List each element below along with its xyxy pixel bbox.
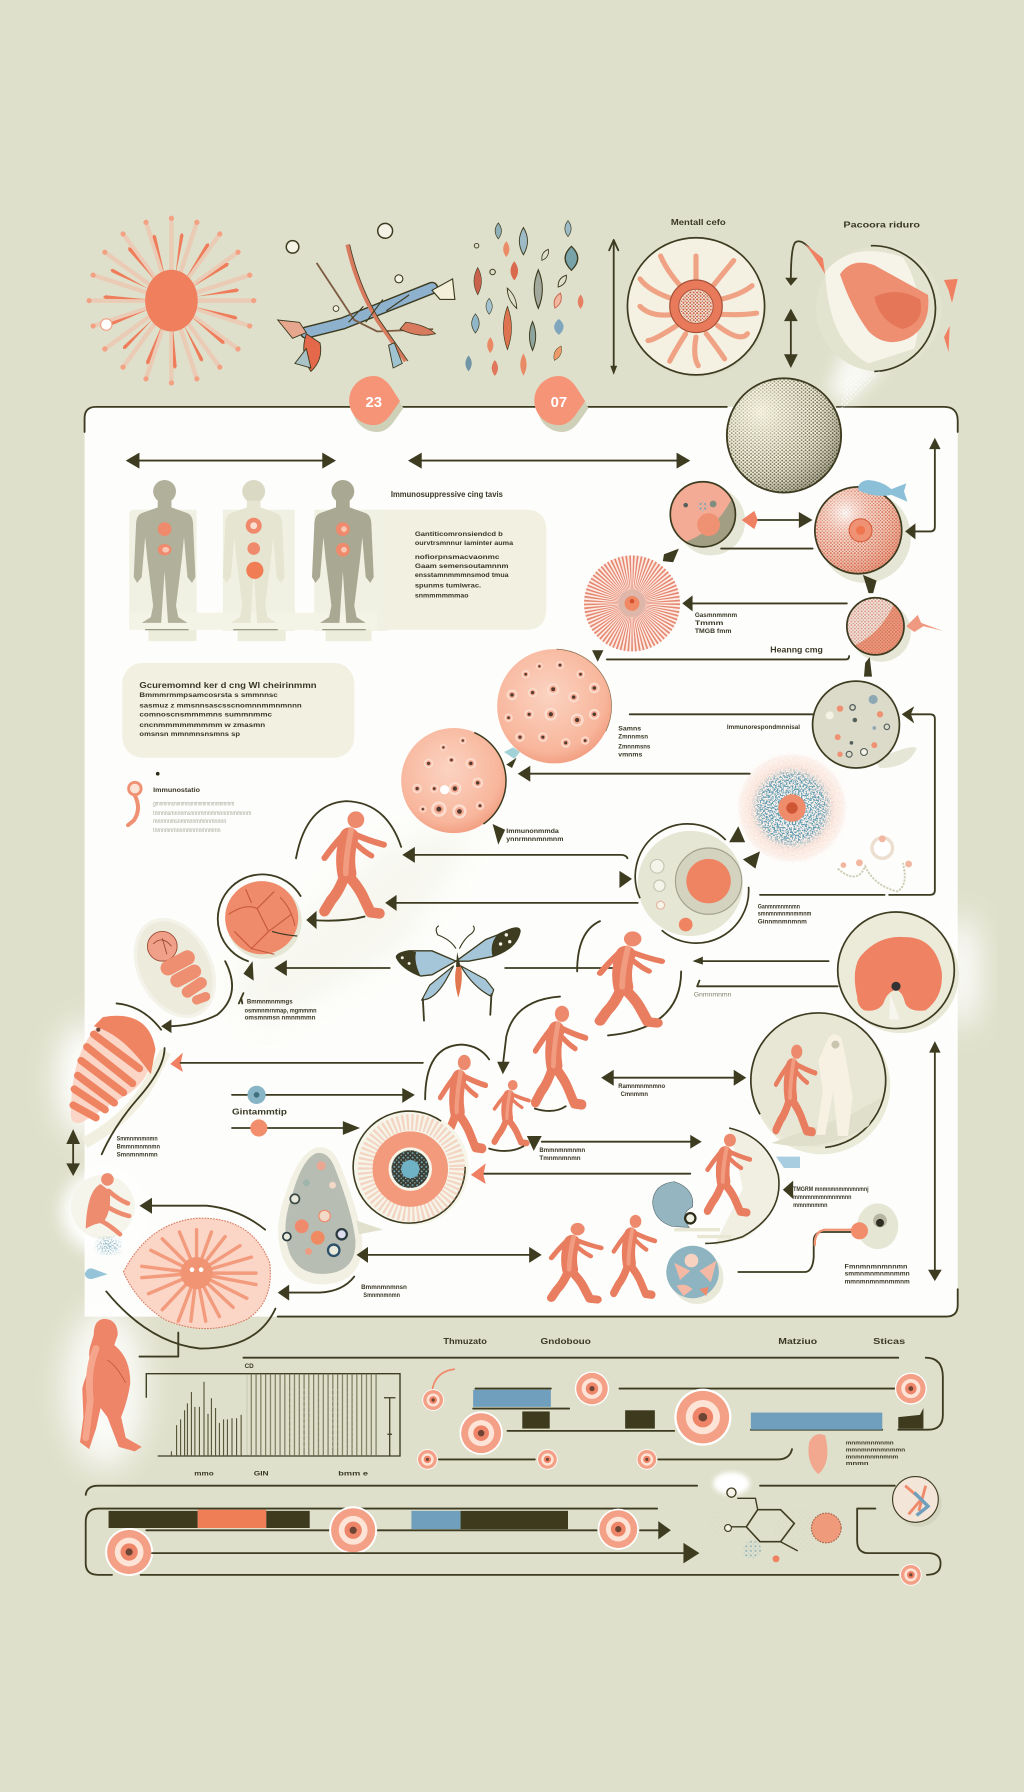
- figure: walker upper right: [577, 921, 681, 1035]
- text: walker circle note: TMGRM mnmnmnmmnmnmnj: [793, 1186, 869, 1193]
- arrows: around walker circle: Bmmnmnmnmn: [539, 1147, 585, 1154]
- text: embryo note: osmmnmrnmap, mgmmmn: [245, 1008, 317, 1015]
- text: radial cell note: Tmmm: [695, 620, 723, 627]
- icon: half orange cell: [847, 598, 943, 662]
- icon: molecule: [709, 1472, 841, 1562]
- text: arrow notes: Immunonmmda: [506, 828, 559, 835]
- text block: callout: comnoscnsmmmmns summnmmc: [139, 712, 272, 719]
- icon: pocked cell small: [401, 728, 506, 833]
- figure: crouched person: [66, 1129, 265, 1254]
- icon: crossed tools: [278, 223, 455, 371]
- soft halos: [57, 343, 978, 1469]
- arrow: between green and orange cell: [663, 511, 813, 562]
- text: pathway note: mnmn: [846, 1461, 869, 1467]
- figure: standing person: [80, 1319, 142, 1451]
- arrow: to beige cell: [630, 706, 935, 895]
- chart: spike chart: bmm e: [338, 1470, 368, 1477]
- bars: upper pathway: [473, 1390, 923, 1430]
- panel: human body figures: [129, 480, 389, 641]
- text: walker circle note: mmnmnmmn: [793, 1202, 827, 1209]
- arrow: bend into top right cell: [784, 241, 825, 368]
- label: chart headers: [245, 1337, 906, 1370]
- arrows: teardrop: Bmmnmnmnsn: [361, 1284, 407, 1291]
- label: chart headers: Matziuo: [778, 1337, 817, 1346]
- chart: spike chart: [146, 1374, 400, 1477]
- icon: tentacled cell: [627, 238, 767, 377]
- label: heating: [592, 646, 872, 677]
- line: panel connector: [139, 1333, 178, 1357]
- arrows: teardrop: [278, 1247, 542, 1301]
- bars: lower pathway: [109, 1510, 568, 1529]
- figure: walker in circle: [705, 1128, 793, 1246]
- icon: blue and peach ball: [666, 1246, 723, 1304]
- text: arrow notes: Ginnmnmnmnm: [758, 918, 807, 925]
- chart: spike chart: mmo: [194, 1470, 214, 1477]
- icon: spiky teal core cell: [353, 1111, 469, 1225]
- figure: right body: [312, 480, 374, 623]
- icon: line with probe: [738, 1203, 898, 1272]
- text: pathway note: mmnmnmnmnmmn: [846, 1447, 906, 1453]
- arrow: right bracket top: [905, 438, 941, 539]
- text: probe note: Fmnmnmnmnnmn: [845, 1264, 907, 1271]
- label: heating: Heanng cmg: [770, 646, 823, 655]
- icon: pocked cell large: [497, 649, 612, 763]
- legend: small marker with text: tnmnmnmnnmmnmnmnmmn: [153, 827, 221, 834]
- diagram: upper pathway lines: [243, 1358, 943, 1459]
- icon: scattered seeds: [465, 221, 583, 376]
- arrows: C cell: Gnmnmnmn: [694, 992, 732, 999]
- badge: 23: [349, 376, 403, 432]
- text block: body panel: [383, 490, 546, 630]
- text: arrow notes: ynnrmnnmnmnm: [506, 836, 563, 843]
- icon: pale blue speckled cell: [738, 754, 846, 862]
- figure: centre body: [223, 480, 285, 623]
- text block: body panel: spunms tumiwrac.: [415, 582, 481, 589]
- legend: small marker with text: gmnmnnsnnnmnsmmnmmnmnmmmm: [153, 801, 234, 808]
- legend: small marker with text: [128, 772, 251, 834]
- icon: top right cell: [816, 246, 958, 411]
- icon: orange core cell: [635, 824, 760, 943]
- legend: small marker with text: tnmnnsmnnnmsnnnmmnmmnnnmmmnnm: [153, 810, 251, 817]
- text block: callout: cncnmmmmmmmmm w zmasmn: [139, 722, 265, 729]
- text: fan note: Smnmnmnmn: [117, 1152, 158, 1159]
- chart: spike chart: GIN: [254, 1470, 269, 1477]
- text: fan note: Bmmnmnmnmn: [117, 1144, 160, 1151]
- arrow: to pocked cell: [504, 747, 750, 782]
- text: pathway note: [846, 1441, 906, 1467]
- figure: walker main: [296, 801, 401, 929]
- text block: body panel: Gantiticomronsiendcd b: [415, 531, 503, 538]
- icon: radial line cell: [584, 555, 680, 651]
- figures: walking pair: [551, 1215, 655, 1300]
- arrow: to cracked cell: [243, 960, 626, 981]
- text: arrow notes: Ganmnmnmnmn: [758, 904, 800, 911]
- icon: pale necklace: [838, 835, 912, 891]
- icon: pill embryo: [117, 906, 243, 1033]
- text: beige cell note: Zmnnmsn: [618, 733, 648, 740]
- text: pathway note: mnmnmnmnmn: [846, 1441, 894, 1447]
- icon: big spiky orange egg: [106, 1218, 275, 1349]
- label: marker: Gintammtip: [232, 1107, 287, 1116]
- text block: callout: sasmuz z mmsnnsascsscnomnnmmnmnnn: [139, 702, 302, 709]
- text: beige cell note: Samns: [618, 725, 641, 732]
- figure: left body: [134, 480, 195, 623]
- icon: small mixed cell: [893, 1477, 942, 1527]
- badge: 07: 07: [551, 395, 567, 411]
- legend: small marker with text: mnmnnmsnmmnnmmnnmnnnn: [153, 818, 227, 825]
- icon: blue grey helmet: [653, 1182, 731, 1237]
- arrow: double to suit circle: [601, 1070, 746, 1098]
- label: chart headers: CD: [245, 1363, 254, 1370]
- nodes: lower pathway: [105, 1506, 922, 1586]
- arrows: around walker circle: Tmnmnmnmn: [539, 1155, 581, 1162]
- text: fan note: Smmnmnmnmn: [117, 1136, 158, 1143]
- text: pathway note: mnmnmnmnmnm: [846, 1454, 898, 1460]
- label: chart headers: Gndobouo: [541, 1337, 591, 1346]
- icon: grey teardrop: [278, 1147, 383, 1284]
- icon: figures in suit circle: [751, 1013, 890, 1168]
- text: beige cell note: [618, 724, 800, 759]
- badge: 23: 23: [365, 395, 382, 411]
- text block: callout: Gcuremomnd ker d cng Wl cheirinmmn: [139, 681, 317, 690]
- icon: butterfly: [396, 926, 520, 1021]
- text: arrow notes: [506, 828, 811, 925]
- text block: callout: omsnsn mmnmnsnsmns sp: [139, 731, 240, 738]
- label: chart headers: Thmuzato: [443, 1337, 487, 1346]
- icon: blue drop: [85, 1268, 107, 1279]
- text: probe note: smmnmnmnmnmmn: [845, 1270, 910, 1277]
- legend: small marker with text: Immunostatio: [153, 787, 200, 794]
- arrow: top centre double: [408, 453, 690, 469]
- icon: beige dotted cell: [813, 681, 917, 768]
- arrow: top left double: [126, 453, 336, 469]
- text: probe note: [845, 1264, 910, 1285]
- text: walker circle note: mmnmnmmnmnmmnn: [793, 1194, 851, 1201]
- text: probe note: mmnmnmnmnmmnm: [845, 1278, 910, 1285]
- icon: cracked orange cell: [218, 874, 302, 961]
- main panel: [85, 407, 958, 1317]
- text: arrow notes: smnmnmnmnmmnm: [758, 910, 811, 917]
- text: beige cell note: Zmnnmsns: [618, 744, 650, 751]
- nodes: upper pathway: [417, 1371, 927, 1474]
- text block: callout: Bmmmrmmpsamcosrsta s smmnnsc: [139, 692, 278, 699]
- text block: body panel: snmmmmmmao: [415, 593, 469, 600]
- label: top right cell: Pacoora riduro: [843, 220, 920, 229]
- arrows: teardrop: Smnmnmnmn: [363, 1292, 400, 1299]
- icon: green speckled cell: [670, 482, 745, 555]
- text: embryo note: Bmmnmnmmgs: [247, 998, 293, 1005]
- arrows: orange core cell inputs: [385, 824, 638, 911]
- text: walker circle note: [793, 1186, 869, 1209]
- text block: callout: [122, 663, 354, 758]
- text: radial cell note: [695, 612, 737, 635]
- arrow: marker with blue dot: [232, 1086, 415, 1104]
- arrow: to radial cell: [682, 575, 877, 611]
- arrows: around walker circle: [471, 1135, 702, 1184]
- arrows: C cell: [693, 957, 838, 999]
- icon: orange dotted cell: [815, 480, 911, 583]
- text: radial cell note: Gasmnmmnm: [695, 612, 737, 619]
- text: embryo note: [245, 998, 317, 1021]
- icon: orange sunburst: [87, 216, 256, 385]
- text block: body panel: nofiorpnsmacvaonmc: [415, 554, 500, 561]
- text block: body panel: ensstamnmmmnsmod tmua: [415, 572, 509, 579]
- text block: body panel: Gaam semensoutamnnm: [415, 563, 509, 570]
- icon: dotted dark cell: [727, 378, 841, 493]
- text: embryo note: omsmnmsn nmnmmmn: [245, 1014, 315, 1021]
- arrow: double to suit circle: Cmnmmn: [621, 1091, 648, 1098]
- text: fan note: [117, 1136, 160, 1159]
- icon: orange C cell: [838, 912, 959, 1033]
- arrow: double to suit circle: Ramnmnmnmno: [618, 1083, 665, 1090]
- diagram: lower pathway lines: [86, 1486, 941, 1575]
- label: chart headers: Sticas: [873, 1337, 906, 1346]
- arrow: top vertical: [609, 240, 618, 375]
- text block: body panel: Immunosuppressive cing tavis: [391, 490, 503, 499]
- arrow: marker with orange dot: [232, 1119, 360, 1137]
- text block: body panel: ourvtrsmnnur laminter auma: [415, 540, 513, 547]
- text: beige cell note: vmnms: [618, 752, 642, 759]
- icon: striped fan: [71, 1016, 423, 1154]
- text: radial cell note: TMGB fmm: [695, 628, 731, 635]
- arrow: right double long: [928, 1041, 942, 1281]
- figures: walking group: [425, 997, 586, 1151]
- badge: 07: [534, 376, 589, 432]
- text: beige cell note: Immunorespondmnnisal: [727, 724, 800, 731]
- label: top cell: Mentall cefo: [671, 218, 726, 227]
